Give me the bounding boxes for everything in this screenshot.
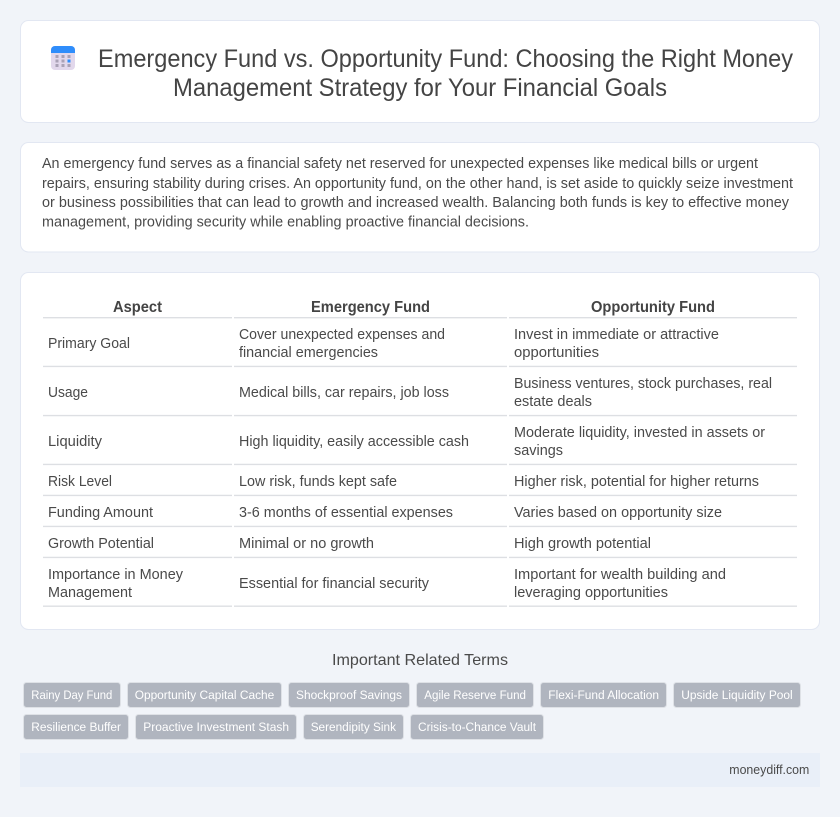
row: growth potential (48, 536, 651, 552)
tag: agile reserve fund (416, 682, 534, 708)
tag: rainy day fund: Rainy Day Fund (31, 688, 112, 702)
table header row: Aspect (113, 299, 163, 316)
tag: agile reserve fund: Agile Reserve Fund (424, 688, 526, 702)
row: liquidity (48, 425, 765, 459)
row: primary goal (48, 327, 719, 361)
title: Management Strategy for Your Financial Goals (173, 74, 667, 102)
tag: crisis-to-chance vault (410, 714, 544, 740)
table header row: Emergency Fund (311, 299, 430, 316)
row: growth potential: Minimal or no growth (239, 536, 374, 552)
tag: resilience buffer (24, 714, 128, 740)
tag: shockproof savings: Shockproof Savings (296, 688, 402, 702)
tag: shockproof savings (288, 682, 410, 708)
row: usage: Usage (48, 385, 88, 401)
row: liquidity: Liquidity (48, 434, 103, 450)
tag: crisis-to-chance vault: Crisis-to-Chance Vault (418, 720, 537, 734)
title (98, 45, 793, 102)
panel: introduction (20, 142, 820, 252)
text block: introduction paragraph: repairs, ensuring stability during crises. An opportunity fund, on the other hand, is set aside to quickly seize investment (42, 176, 793, 192)
row: funding amount: 3-6 months of essential expenses (239, 505, 453, 521)
icon: calendar (51, 46, 75, 70)
row: importance in money management: Essential for financial security (239, 576, 430, 592)
row: importance in money management: Management (48, 585, 132, 601)
text block: introduction paragraph: management, providing security while enabling proactive financial decisions. (42, 214, 529, 230)
row: risk level: Risk Level (48, 474, 112, 490)
row: liquidity: savings (514, 443, 563, 459)
table header row (113, 299, 715, 316)
tag: resilience buffer: Resilience Buffer (31, 720, 121, 734)
panel: header (20, 20, 820, 122)
tag: flexi-fund allocation (540, 682, 666, 708)
tags: related terms (24, 682, 800, 740)
tag: proactive investment stash (136, 714, 296, 740)
tag: opportunity capital cache: Opportunity Capital Cache (135, 688, 275, 702)
row: growth potential: High growth potential (514, 536, 651, 552)
tag: serendipity sink (304, 714, 404, 740)
row: usage: estate deals (514, 394, 592, 410)
panel: comparison table (20, 272, 820, 630)
row: funding amount (48, 505, 722, 521)
text block: introduction paragraph: or business possibilities that can lead to growth and increased wealth. Balancing both funds is key to effective money (42, 195, 790, 211)
row: growth potential: Growth Potential (48, 536, 154, 552)
row: importance in money management (48, 567, 726, 601)
row: primary goal: Invest in immediate or attractive (514, 327, 719, 343)
tag: rainy day fund (24, 682, 120, 708)
row: primary goal: Primary Goal (48, 336, 130, 352)
footer (20, 753, 820, 787)
title: Emergency Fund vs. Opportunity Fund: Choosing the Right Money (98, 45, 793, 73)
text block: introduction paragraph (42, 156, 793, 230)
row: usage: Medical bills, car repairs, job loss (239, 385, 449, 401)
row: importance in money management: Importance in Money (48, 567, 184, 583)
row: risk level (48, 474, 759, 490)
tag: proactive investment stash: Proactive Investment Stash (143, 720, 289, 734)
row: risk level: Low risk, funds kept safe (239, 474, 397, 490)
tag: upside liquidity pool (674, 682, 800, 708)
row: primary goal: financial emergencies (239, 345, 378, 361)
row: primary goal: Cover unexpected expenses and (239, 327, 445, 343)
row: importance in money management: leveraging opportunities (514, 585, 668, 601)
tag: serendipity sink: Serendipity Sink (311, 720, 397, 734)
row: funding amount: Varies based on opportunity size (514, 505, 722, 521)
table header row: Opportunity Fund (591, 299, 715, 316)
text block: introduction paragraph: An emergency fund serves as a financial safety net reserved for unexpected expenses like medical bills or urgent (42, 156, 758, 172)
row: usage (48, 376, 772, 410)
row: risk level: Higher risk, potential for higher returns (514, 474, 759, 490)
tag: flexi-fund allocation: Flexi-Fund Allocation (548, 688, 659, 702)
tag: opportunity capital cache (128, 682, 282, 708)
tag: upside liquidity pool: Upside Liquidity Pool (681, 688, 793, 702)
row: funding amount: Funding Amount (48, 505, 153, 521)
heading: important related terms: Important Related Terms (332, 652, 508, 669)
row: liquidity: High liquidity, easily accessible cash (239, 434, 469, 450)
row: importance in money management: Important for wealth building and (514, 567, 726, 583)
row: primary goal: opportunities (514, 345, 599, 361)
row: usage: Business ventures, stock purchases, real (514, 376, 772, 392)
row: liquidity: Moderate liquidity, invested in assets or (514, 425, 765, 441)
footer: moneydiff.com (729, 762, 809, 777)
